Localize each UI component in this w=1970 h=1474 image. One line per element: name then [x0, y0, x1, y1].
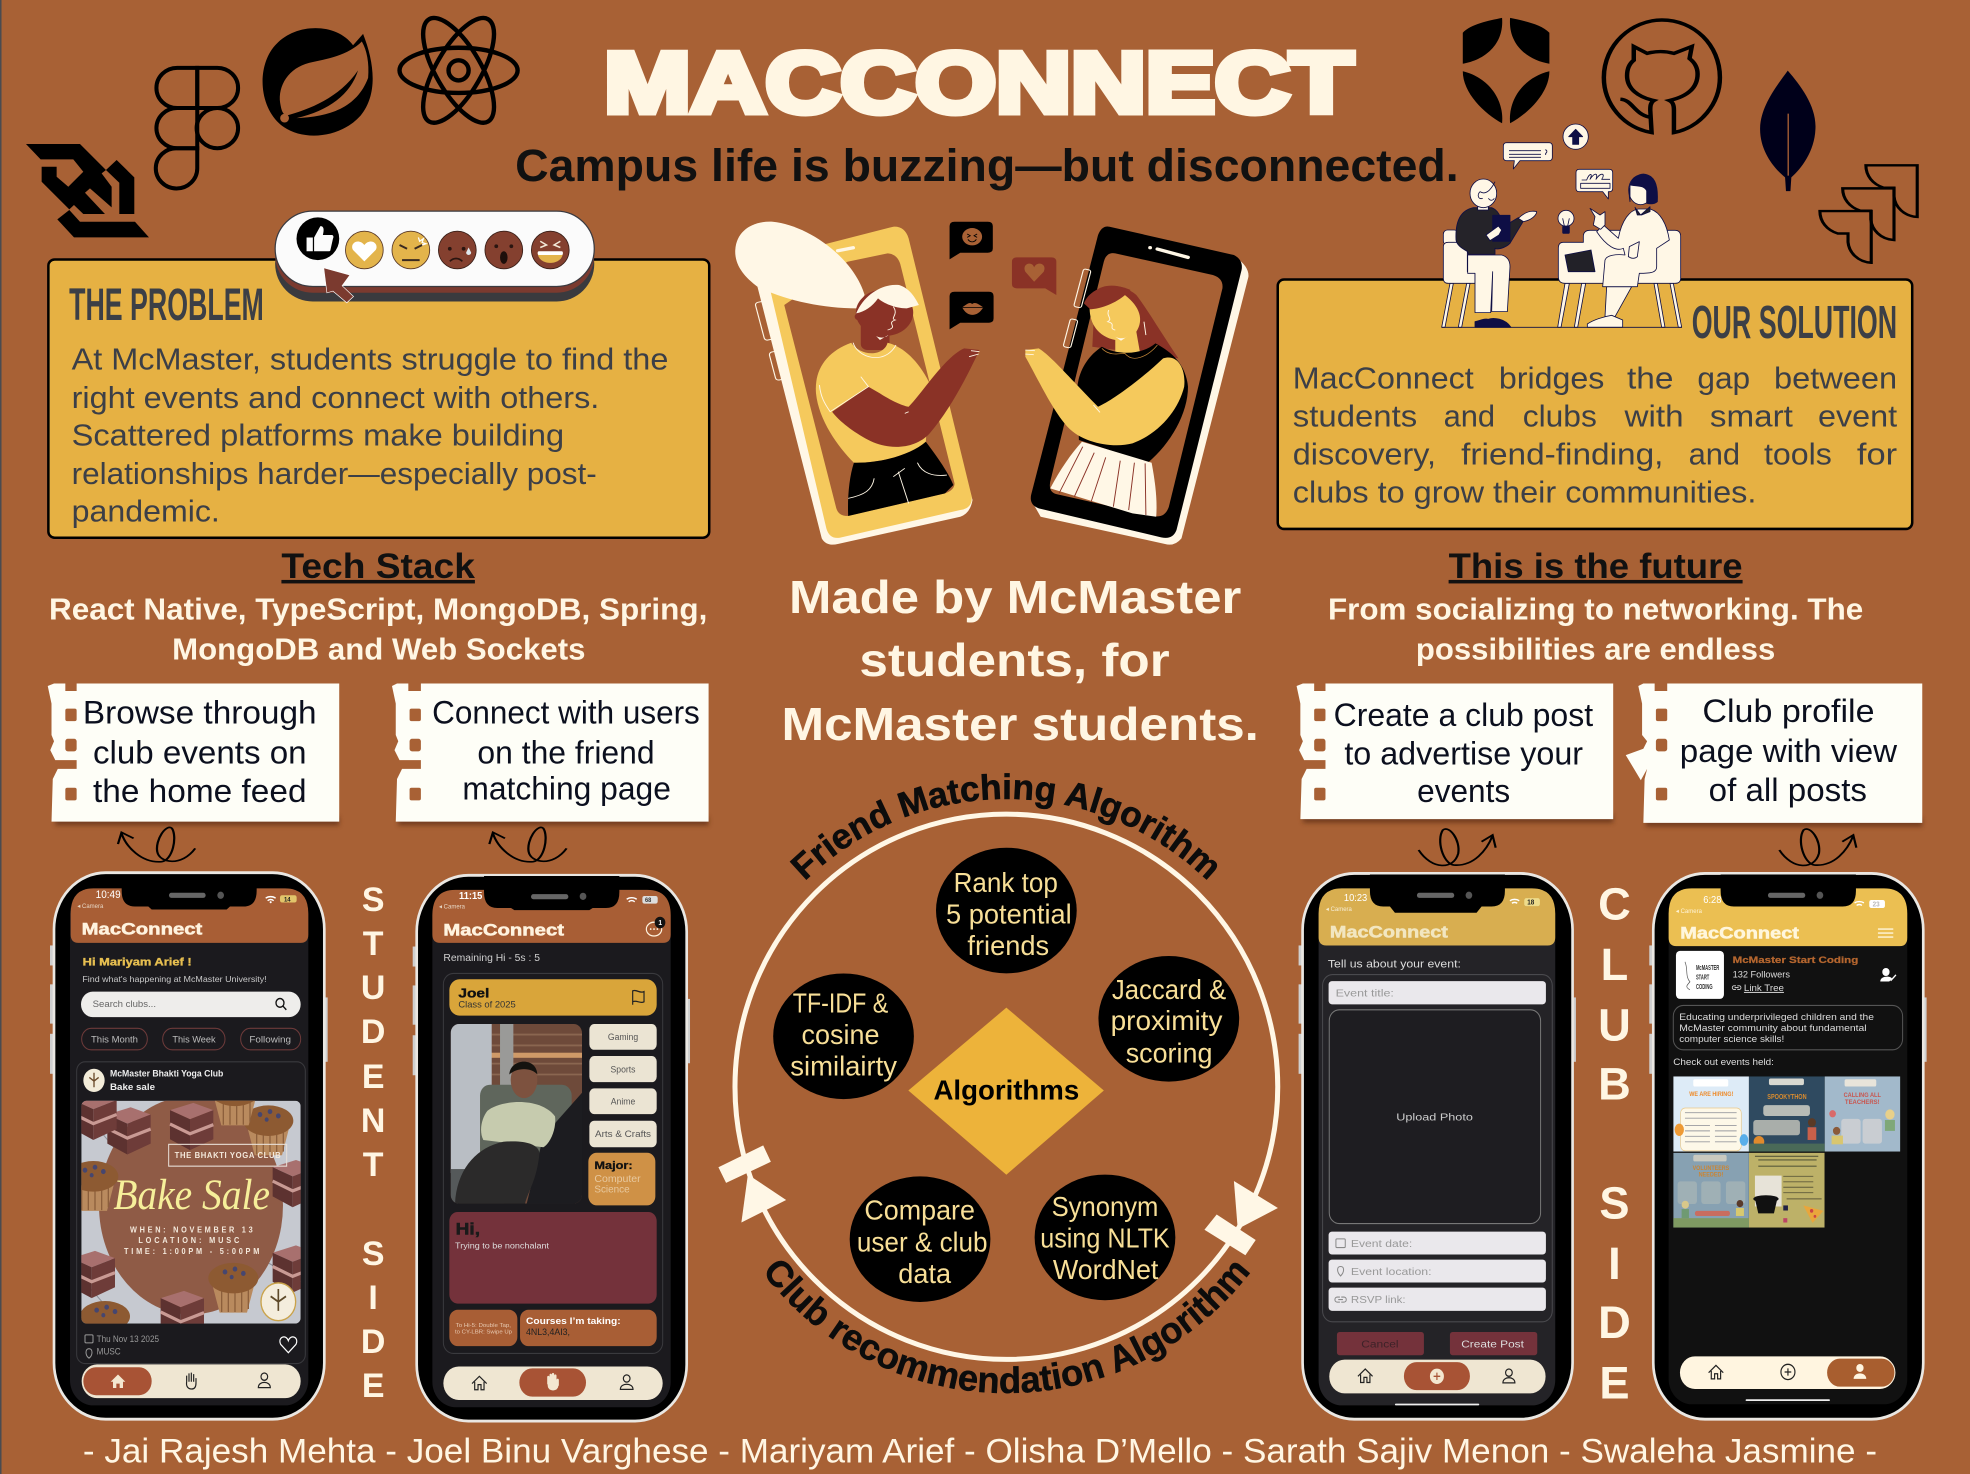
app header: ◂ Camera [1326, 906, 1352, 913]
event details [85, 1333, 297, 1358]
solution text: gap [1697, 360, 1750, 395]
step: rank top friends: Rank top [954, 867, 1058, 898]
step: tf-idf and cosine similarity: TF-IDF & [793, 988, 888, 1019]
heading: tech stack: Tech Stack [281, 547, 475, 586]
solution text: between [1774, 360, 1897, 395]
bio box: Trying to be nonchalant [455, 1241, 550, 1250]
step: compare user and club data: data [898, 1258, 952, 1289]
icon: auth0 shield [1463, 18, 1549, 123]
club post header: Bake sale [110, 1081, 155, 1092]
note: browse club events [48, 683, 339, 825]
profile name bar: Joel [458, 986, 489, 1001]
phone: club profile screen [1649, 873, 1927, 1419]
courses box: 4NL3,4AI3, [526, 1327, 570, 1337]
club description: Educating underprivileged children and the [1679, 1012, 1874, 1022]
label: club side: S [1599, 1178, 1630, 1229]
icon: wow reaction [485, 231, 523, 269]
event details: Thu Nov 13 2025 [97, 1333, 159, 1344]
heading: the problem: THE PROBLEM [69, 279, 264, 330]
interest chips: Sports [611, 1064, 636, 1075]
reaction bar [275, 211, 594, 303]
problem text: At McMaster, students struggle to find the [72, 342, 668, 377]
club logo [1676, 951, 1724, 999]
app header: 10:49 [96, 890, 121, 901]
label: student side: D [361, 1323, 385, 1361]
note: club profile page: Club profile [1702, 692, 1875, 729]
tagline: McMaster students. [781, 698, 1259, 750]
form buttons: Create Post [1461, 1339, 1524, 1351]
post: volunteers needed: NEEDED! [1699, 1171, 1723, 1179]
club details [1732, 955, 1896, 993]
event form: Event date: [1351, 1239, 1412, 1250]
left chair [1442, 230, 1475, 327]
label: student side [361, 881, 385, 1405]
arrow: left cycle arrow [718, 1145, 786, 1222]
problem text: right events and connect with others. [72, 380, 599, 415]
bio box [449, 1212, 657, 1304]
major box [588, 1153, 655, 1205]
center diamond: algorithms: Algorithms [933, 1074, 1079, 1105]
tech stack list: MongoDB and Web Sockets [172, 634, 585, 667]
icon: cursor arrow [324, 268, 354, 303]
label: club side: C [1598, 879, 1631, 930]
label: student side: S [362, 1235, 384, 1273]
left phone [755, 227, 973, 545]
note: create club post: Create a club post [1334, 696, 1593, 733]
app header: 18 [1527, 900, 1535, 907]
step: synonym using nltk wordnet [1035, 1175, 1175, 1300]
solution text: friend-finding, [1461, 436, 1663, 471]
step: compare user and club data: Compare [864, 1194, 975, 1225]
label: club side: E [1599, 1357, 1630, 1408]
bottom navigation [443, 1366, 663, 1400]
illustration: two people connecting through phones [735, 222, 1248, 545]
filter chips: This Month [91, 1034, 138, 1045]
note: create club post: to advertise your [1344, 735, 1583, 772]
icon: laugh reaction [531, 231, 569, 269]
arrow: friend note to phone 2 [489, 827, 567, 862]
post: we are hiring: WE ARE HIRING! [1689, 1091, 1733, 1098]
problem text: Scattered platforms make building [72, 418, 564, 453]
app header: MacConnect [443, 921, 565, 940]
icon: jira logo [1820, 165, 1917, 263]
solution text [1293, 360, 1898, 509]
solution text: discovery, [1293, 436, 1436, 471]
gesture hint: To Hi-5: Double Tap, [456, 1323, 511, 1329]
future text: possibilities are endless [1416, 634, 1775, 667]
icon: light bulb [1558, 210, 1574, 233]
filter chips: Following [249, 1034, 291, 1045]
post: pizza party [1749, 1153, 1825, 1228]
step: jaccard and proximity scoring: scoring [1126, 1037, 1212, 1068]
event poster: bake sale: THE BHAKTI YOGA CLUB [175, 1151, 281, 1160]
app header: 10:23 [1344, 893, 1367, 904]
event poster: bake sale: TIME: 1:00PM - 5:00PM [124, 1247, 259, 1256]
label: student side: T [363, 925, 384, 963]
club logo: McMASTER [1696, 965, 1719, 972]
app header: 6:28 [1703, 895, 1721, 906]
step: synonym using nltk wordnet: WordNet [1053, 1254, 1159, 1285]
tagline [781, 571, 1259, 750]
note: club profile page: page with view [1680, 732, 1898, 769]
app header [432, 890, 671, 943]
label: student side: E [362, 1367, 384, 1405]
note: friend matching [392, 683, 709, 825]
club post header [83, 1068, 223, 1092]
solution text: clubs [1523, 399, 1597, 434]
post: calling all teachers: CALLING ALL [1844, 1092, 1881, 1099]
arrow: profile note to phone 4 [1779, 829, 1856, 865]
solution text: MacConnect [1293, 360, 1474, 395]
panel: our solution [1278, 280, 1912, 529]
label: student side: T [363, 1146, 384, 1184]
right phone [1031, 226, 1248, 545]
step: rank top friends: friends [967, 930, 1049, 961]
post: calling all teachers: TEACHERS! [1845, 1099, 1880, 1106]
solution text: and [1444, 399, 1495, 434]
solution text: clubs to grow their communities. [1293, 474, 1756, 509]
label: student side: I [368, 1279, 378, 1317]
bottom navigation [1680, 1356, 1895, 1389]
phone: home feed screen: Find what's happening at McMaster University! [82, 975, 267, 984]
phone: friend matching screen: Remaining Hi - 5s : 5 [443, 953, 541, 964]
step: rank top friends [936, 848, 1077, 973]
tech stack list: React Native, TypeScript, MongoDB, Spring, [49, 593, 707, 626]
search bar [81, 992, 301, 1017]
icon: heart chat bubble [1012, 257, 1056, 295]
club description: McMaster community about fundamental [1679, 1023, 1867, 1033]
label: student side: U [361, 969, 385, 1007]
phone: home feed screen [50, 873, 328, 1419]
app header: ◂ Camera [439, 904, 465, 911]
app header: 23 [1873, 901, 1880, 909]
note: friend matching: Connect with users [432, 694, 700, 731]
interest chips [589, 1024, 657, 1147]
solution text: students [1293, 399, 1417, 434]
courses box [520, 1310, 657, 1346]
profile name bar [449, 979, 657, 1016]
note: browse club events: club events on [93, 733, 307, 770]
app header: ◂ Camera [1676, 908, 1702, 915]
icon: heart reaction [346, 231, 383, 269]
event form: RSVP link: [1351, 1295, 1406, 1306]
step: tf-idf and cosine similarity: similairty [790, 1050, 897, 1081]
app header: 11:15 [459, 891, 483, 902]
notch [1370, 875, 1505, 913]
bottom navigation [1329, 1360, 1546, 1393]
label: club side: I [1608, 1238, 1621, 1289]
solution text: and [1689, 436, 1740, 471]
label: club side: D [1598, 1297, 1631, 1348]
gesture hint: to CY-LBR: Swipe Up [455, 1329, 512, 1335]
club details: Link Tree [1744, 983, 1784, 993]
app header: ◂ Camera [77, 903, 104, 910]
app header: MacConnect [82, 920, 203, 939]
club logo: START [1696, 974, 1710, 982]
solution text: smart [1710, 399, 1793, 434]
bottom navigation [82, 1364, 301, 1398]
right person [1025, 286, 1188, 517]
event form: Event title: [1336, 988, 1394, 1000]
club description: computer science skills! [1679, 1033, 1784, 1044]
note: club profile page: of all posts [1709, 771, 1867, 808]
search bar: Search clubs... [93, 999, 156, 1009]
ring [735, 814, 1278, 1359]
club details: 132 Followers [1733, 969, 1790, 980]
major box: Major: [594, 1161, 633, 1172]
future text: From socializing to networking. The [1328, 593, 1863, 626]
tech stack list [49, 593, 707, 667]
phone: friend matching screen [413, 875, 690, 1421]
tagline: Made by McMaster [789, 571, 1241, 623]
profile photo [451, 1024, 582, 1204]
tech stack block [49, 547, 707, 667]
arc label: club recommendation algorithm: Club recommendation Algorithm [766, 1260, 1250, 1394]
step: synonym using nltk wordnet: using NLTK [1040, 1223, 1170, 1254]
step: tf-idf and cosine similarity: cosine [802, 1019, 879, 1050]
label: student side: D [361, 1013, 385, 1051]
bio box: Hi, [456, 1220, 480, 1239]
app header [1669, 888, 1907, 946]
gesture hint [449, 1310, 517, 1346]
icon: note speech bubble [1576, 169, 1613, 199]
label: club side [1598, 879, 1631, 1408]
icon: figma logo [156, 68, 238, 188]
icon: laptop [1565, 250, 1595, 272]
icon: question speech bubble [1503, 143, 1552, 169]
interest chips: Arts & Crafts [595, 1129, 652, 1139]
app header: 14 [284, 896, 291, 904]
app header: MacConnect [1330, 923, 1449, 942]
icon: web sockets logo [26, 144, 149, 237]
illustration: two people talking on chairs [1442, 124, 1682, 327]
solution text: for [1857, 436, 1897, 471]
future block [1328, 547, 1863, 667]
icon: lips chat bubble [950, 292, 994, 329]
label: student side: E [362, 1058, 384, 1096]
diagram: algorithms cycle [718, 773, 1280, 1394]
event poster: bake sale: Bake Sale [113, 1170, 270, 1218]
app header: 1 [658, 920, 662, 927]
app header [1319, 888, 1555, 945]
event poster: bake sale [81, 1100, 301, 1324]
note: club profile page [1626, 683, 1922, 827]
phone: create post screen [1299, 873, 1576, 1419]
filter chips: This Week [172, 1034, 217, 1045]
step: compare user and club data [850, 1176, 990, 1302]
icon: sad reaction [438, 231, 476, 269]
solution text: bridges [1499, 360, 1604, 395]
club logo: CODING [1696, 984, 1713, 991]
phone: club profile screen: Check out events held: [1673, 1057, 1774, 1067]
label: club side: U [1598, 999, 1631, 1050]
label: club side: L [1601, 939, 1628, 990]
notch [1721, 875, 1856, 907]
right person [1587, 174, 1669, 327]
note: browse club events: the home feed [93, 772, 307, 809]
interest chips: Gaming [608, 1032, 638, 1042]
post: spookython: SPOOKYTHON [1767, 1094, 1807, 1101]
event form [1323, 975, 1552, 1322]
phone: create post screen: Tell us about your event: [1328, 959, 1461, 970]
note: friend matching: on the friend [477, 733, 655, 770]
filter chips [82, 1028, 301, 1050]
notch [484, 876, 619, 910]
step: synonym using nltk wordnet: Synonym [1052, 1191, 1158, 1222]
interest chips: Anime [611, 1096, 635, 1107]
solution text: the [1627, 360, 1673, 395]
icon: mongodb leaf [1760, 71, 1816, 191]
step: compare user and club data: user & club [857, 1226, 988, 1257]
panel: the problem [48, 259, 709, 538]
courses box: Courses I’m taking: [526, 1316, 621, 1326]
form buttons [1337, 1332, 1537, 1355]
speech bubble [735, 222, 865, 308]
step: tf-idf and cosine similarity [773, 973, 914, 1099]
major box: Computer [594, 1172, 641, 1184]
tagline: students, for [859, 634, 1170, 686]
arrow: post note to phone 3 [1419, 829, 1496, 865]
solution text: with [1623, 399, 1684, 434]
notch [122, 875, 257, 909]
club description [1673, 1005, 1903, 1050]
form buttons: Cancel [1361, 1339, 1399, 1351]
app header: 68 [645, 898, 652, 904]
event details: MUSC [97, 1346, 121, 1357]
greeting: Hi Mariyam Arief ! [83, 957, 192, 969]
event poster: bake sale: LOCATION: MUSC [138, 1236, 240, 1245]
center diamond: algorithms [908, 1008, 1104, 1175]
step: jaccard and proximity scoring: proximity [1111, 1005, 1223, 1036]
icon: react logo [400, 8, 518, 133]
icon: like button [297, 217, 339, 260]
title: MACCONNECT [604, 36, 1353, 131]
heading: this is the future: This is the future [1449, 547, 1743, 586]
icon: spring logo [263, 28, 373, 136]
arrow: right cycle arrow [1204, 1181, 1278, 1255]
post grid [1673, 1076, 1900, 1228]
app header [71, 888, 308, 943]
step: rank top friends: 5 potential [946, 898, 1072, 929]
solution text: tools [1764, 436, 1832, 471]
note: friend matching: matching page [462, 770, 671, 807]
icon: github logo [1604, 20, 1720, 133]
event form: Upload Photo [1396, 1112, 1474, 1123]
label: student side: S [362, 881, 384, 919]
note: browse club events: Browse through [83, 694, 317, 731]
arc label: friend matching algorithm: Friend Matching Algorithm [790, 773, 1218, 880]
problem text: pandemic. [72, 494, 220, 529]
future text [1328, 593, 1863, 667]
club post header: McMaster Bhakti Yoga Club [110, 1068, 223, 1078]
note: create club post [1297, 683, 1613, 823]
left person [816, 285, 979, 516]
solution text: event [1818, 399, 1898, 434]
event form: Event location: [1351, 1267, 1432, 1278]
post: calling all teachers [1825, 1076, 1900, 1152]
note: create club post: events [1417, 772, 1510, 809]
subtitle: Campus life is buzzing—but disconnected. [515, 140, 1459, 191]
post: volunteers needed: VOLUNTEERS [1693, 1165, 1729, 1172]
step: jaccard and proximity scoring [1098, 956, 1239, 1082]
post: volunteers needed [1673, 1153, 1749, 1228]
step: jaccard and proximity scoring: Jaccard & [1112, 974, 1226, 1005]
label: club side: B [1598, 1058, 1631, 1109]
footer: team names: - Jai Rajesh Mehta - Joel Binu Varghese - Mariyam Arief - Olisha D’Mello - Sarath Sajiv Menon - Swaleha Jasmine - [83, 1432, 1877, 1470]
post: spookython [1749, 1076, 1825, 1152]
label: student side: N [361, 1102, 385, 1140]
club details: McMaster Start Coding [1733, 955, 1858, 965]
icon: laughing chat bubble [950, 222, 993, 259]
event poster: bake sale: WHEN: NOVEMBER 13 [130, 1225, 253, 1234]
arrow: browse note to phone 1 [118, 827, 195, 862]
major box: Science [594, 1183, 630, 1195]
left person [1456, 179, 1537, 327]
right chair [1558, 230, 1682, 327]
post: we are hiring [1673, 1076, 1749, 1152]
app header: MacConnect [1680, 924, 1800, 943]
problem text: relationships harder—especially post- [72, 456, 597, 491]
problem text [72, 342, 668, 529]
icon: angry reaction [392, 231, 430, 269]
profile name bar: Class of 2025 [458, 999, 516, 1010]
icon: up arrow bubble [1563, 124, 1588, 149]
